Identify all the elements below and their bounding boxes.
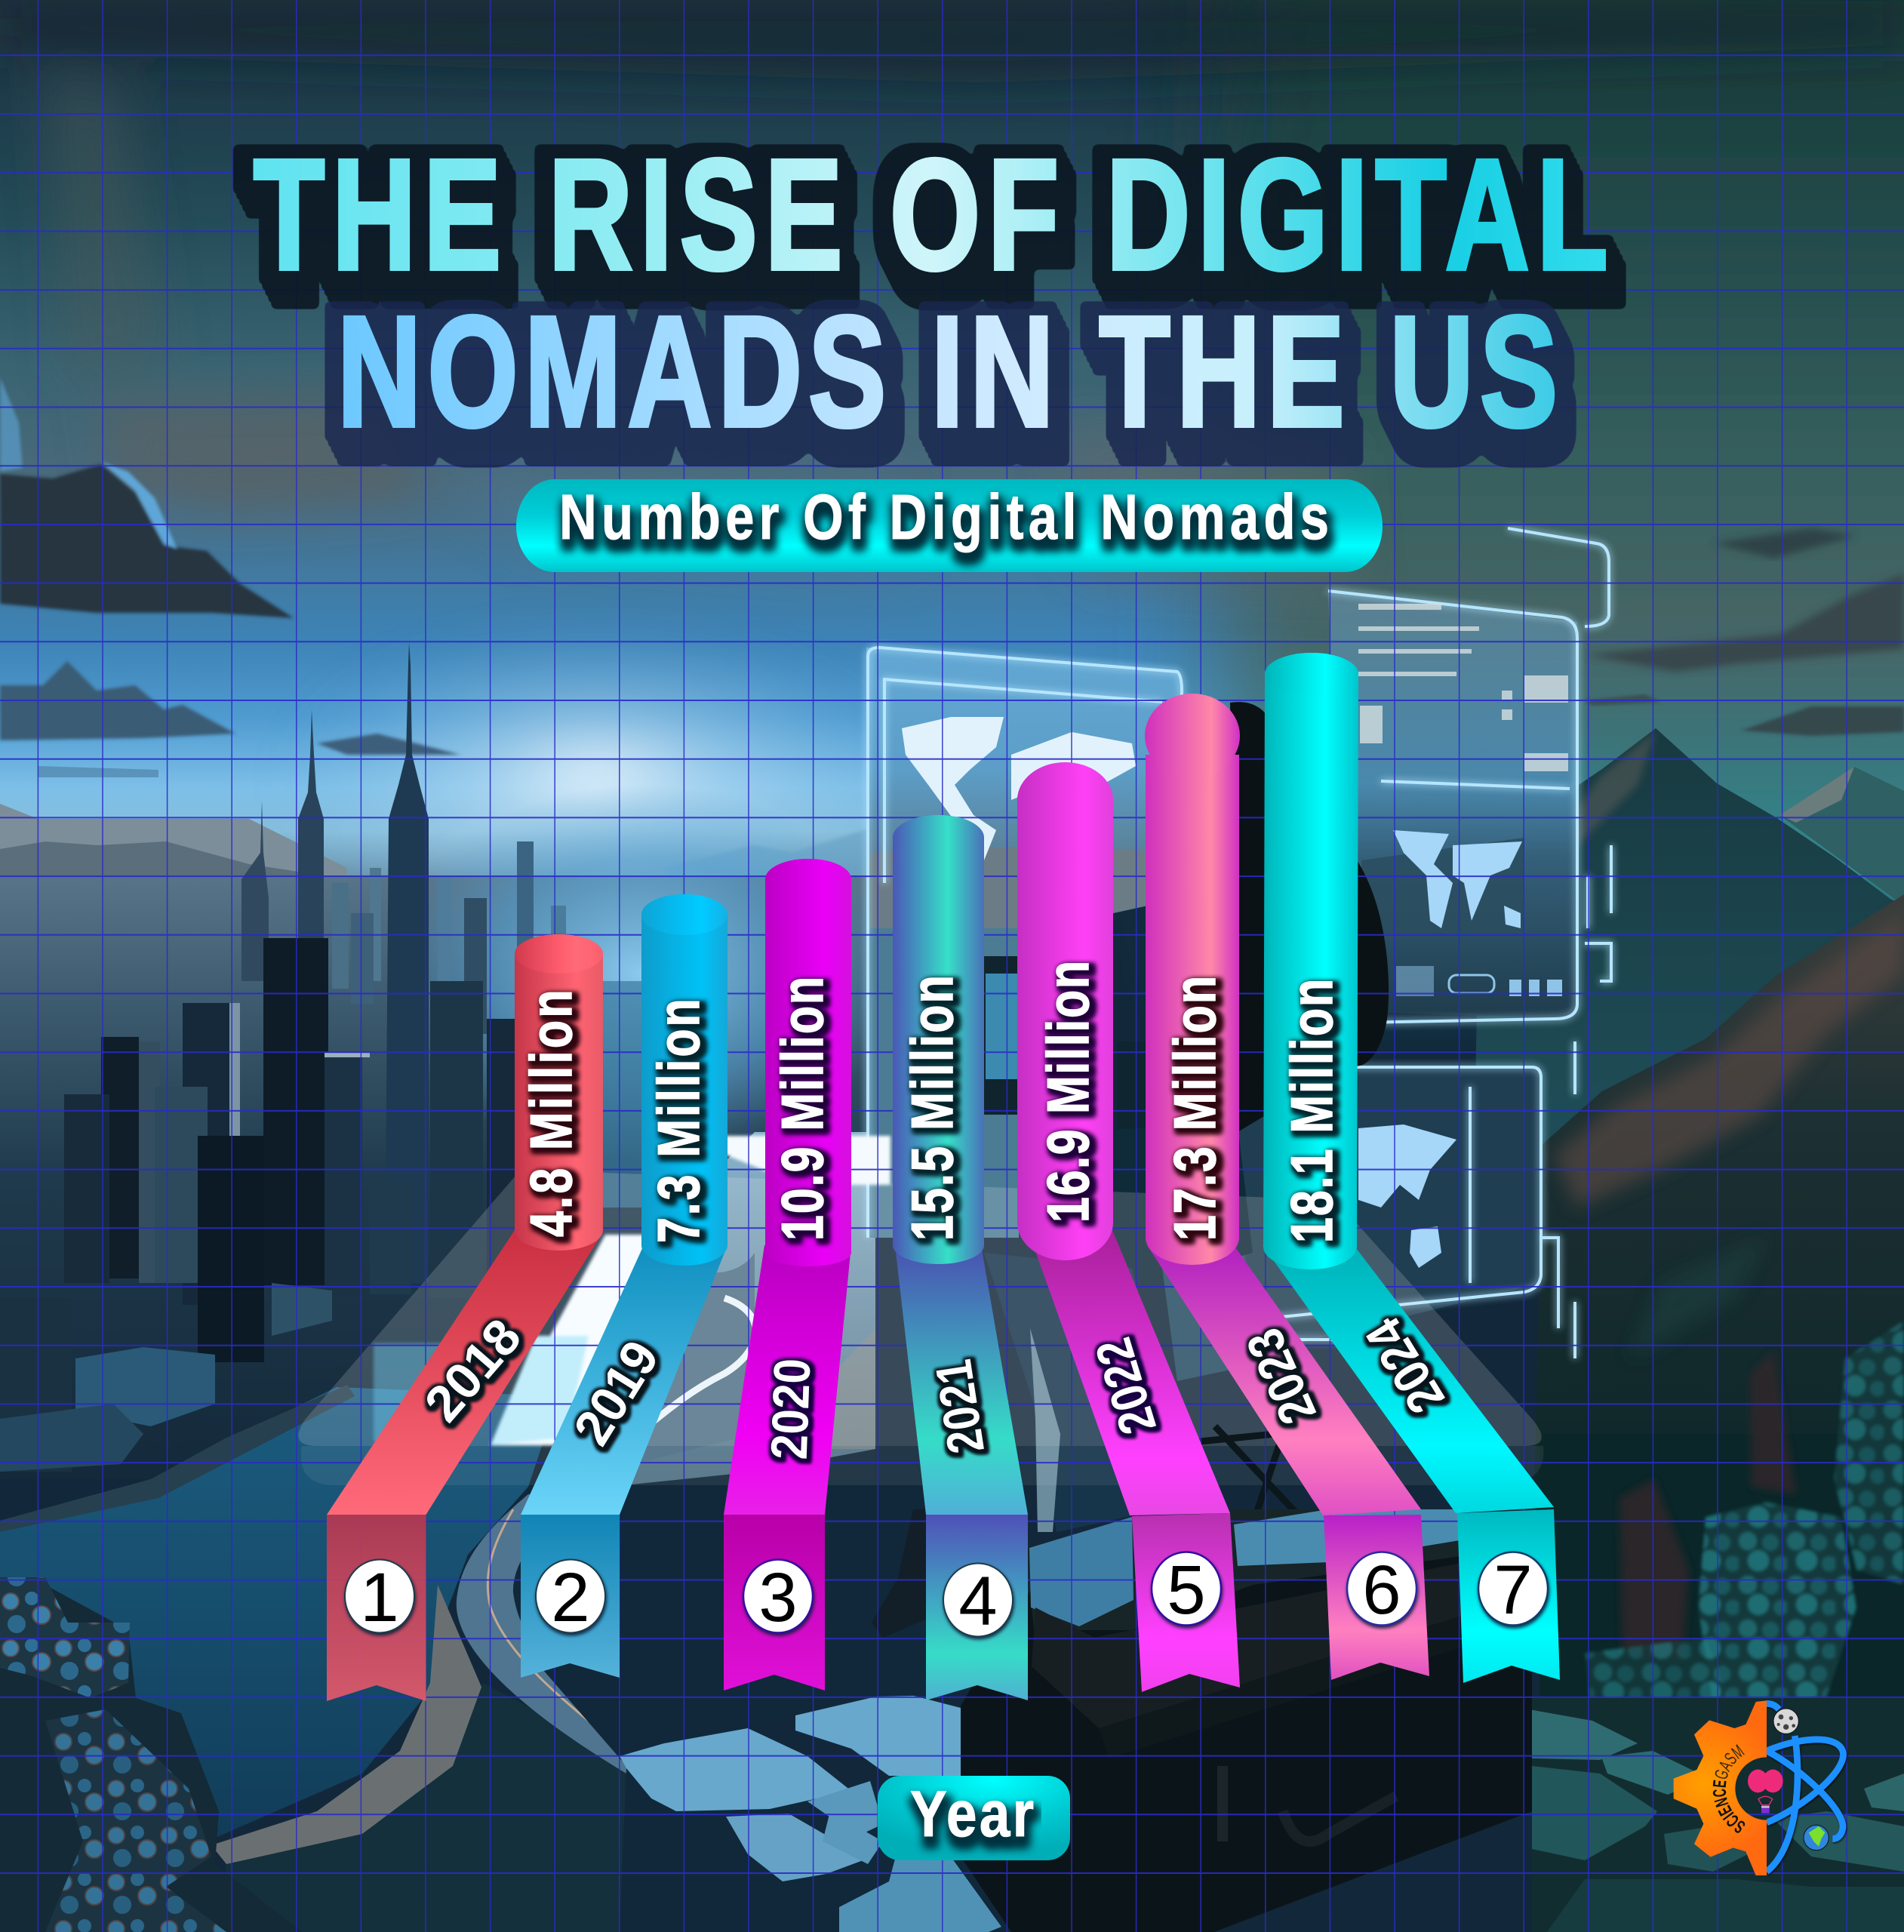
rank 5: 5 <box>1167 1552 1206 1629</box>
cylinder cap 2022 <box>1017 763 1113 837</box>
year 2023: 2023 <box>1235 1320 1327 1432</box>
year 2024: 2024 <box>1355 1308 1456 1423</box>
rank 6: 6 <box>1362 1552 1401 1629</box>
bar 2021: ribbon, cylinder, labels <box>893 815 1028 1700</box>
ribbon upper 2018 <box>327 1230 603 1515</box>
ribbon tail 2018 <box>327 1515 426 1701</box>
world maps <box>902 717 1136 868</box>
left horizon and mountains <box>0 804 347 906</box>
foreground rocks <box>620 1696 1011 1932</box>
value 7.3 Million: 7.3 Million <box>646 998 712 1243</box>
value 17.3 Million: 17.3 Million <box>1162 976 1228 1241</box>
value 16.9 Million: 16.9 Million <box>1035 961 1101 1223</box>
central distant mountains <box>664 826 875 951</box>
cylinder cap 2019 <box>641 894 727 935</box>
ribbon tail 2019 <box>521 1515 620 1678</box>
title line 2: NOMADS IN THE US <box>337 283 1558 459</box>
ribbon upper 2023 <box>1147 1245 1421 1515</box>
value 10.9 Million: 10.9 Million <box>770 977 835 1241</box>
rank 3: 3 <box>758 1559 798 1636</box>
river and shore <box>0 1387 558 1932</box>
cylinder 2022 <box>1017 762 1113 1260</box>
rank 1 <box>345 1559 414 1636</box>
cylinder 2019 <box>641 894 727 1266</box>
rank 7: 7 <box>1493 1552 1533 1629</box>
year axis text: Year <box>910 1777 1034 1850</box>
logo earth <box>1804 1825 1829 1850</box>
bar 2019: ribbon, cylinder, labels <box>521 894 727 1678</box>
rank 4 <box>943 1563 1013 1640</box>
rank 6 <box>1347 1552 1416 1629</box>
ribbon tail 2021 <box>926 1515 1028 1700</box>
panel data bars <box>1358 604 1568 771</box>
value 15.5 Million: 15.5 Million <box>900 975 965 1241</box>
logo gear <box>1674 1700 1767 1875</box>
ribbon upper 2024 <box>1263 1245 1554 1513</box>
clouds <box>0 377 1904 777</box>
right foliage <box>1585 1321 1904 1751</box>
value 4.8 Million: 4.8 Million <box>518 989 584 1237</box>
cylinder cap 2018 <box>515 934 603 974</box>
bar 2022: ribbon, cylinder, labels <box>1017 762 1240 1692</box>
logo wordmark: SCIENCEGASM <box>1713 1744 1745 1833</box>
ribbon upper 2019 <box>521 1245 727 1515</box>
rank 2 <box>536 1559 605 1636</box>
cylinder cap 2020 <box>765 859 851 900</box>
ribbon upper 2020 <box>724 1245 851 1515</box>
ribbon tail 2022 <box>1132 1513 1240 1692</box>
year 2021: 2021 <box>924 1356 995 1457</box>
cylinder 2024 <box>1263 653 1358 1269</box>
cylinder 2023 <box>1146 755 1239 1265</box>
subtitle pill: number of digital nomads <box>516 479 1383 572</box>
ribbon tail 2024 <box>1457 1509 1560 1683</box>
sky glow and soft cloud masses <box>0 0 1904 928</box>
right rocks <box>1529 1698 1904 1932</box>
title line 1: THE RISE OF DIGITAL <box>254 126 1608 302</box>
bar 2018: ribbon, cylinder, labels <box>327 934 603 1701</box>
cylinder cap 2024 <box>1265 653 1358 695</box>
ribbon upper 2021 <box>895 1245 1028 1515</box>
logo moon <box>1773 1709 1798 1734</box>
year 2020: 2020 <box>761 1358 821 1460</box>
bottom-left tree <box>0 1577 302 1932</box>
rank 1: 1 <box>360 1559 399 1636</box>
year 2018: 2018 <box>414 1308 532 1432</box>
logo brain bulb <box>1748 1770 1783 1814</box>
rank 4: 4 <box>958 1563 998 1640</box>
subtitle text: Number Of Digital Nomads <box>559 482 1329 553</box>
year 2022: 2022 <box>1084 1331 1167 1441</box>
bar 2023: ribbon, cylinder, labels <box>1145 694 1429 1680</box>
coastal road <box>457 1494 657 1774</box>
logo: sciencegasm <box>1674 1700 1849 1875</box>
year 2019: 2019 <box>563 1331 670 1455</box>
hillside and winding road <box>574 1132 875 1491</box>
ground behind the ribbons <box>513 1487 1026 1766</box>
bar 2024: ribbon, cylinder, labels <box>1263 653 1560 1683</box>
beach and forest <box>211 1585 483 1864</box>
cylinder 2020 <box>765 859 851 1266</box>
ribbon tail 2020 <box>724 1515 825 1690</box>
seated person <box>872 702 1389 1638</box>
year axis pill <box>878 1776 1070 1860</box>
logo atom <box>1767 1703 1843 1872</box>
title <box>254 126 1607 459</box>
right mountains <box>1472 728 1904 1932</box>
city haze <box>0 875 875 1479</box>
rank 7 <box>1478 1552 1548 1629</box>
value 18.1 Million: 18.1 Million <box>1279 979 1345 1243</box>
rank 3 <box>743 1559 813 1636</box>
panel controls <box>1396 966 1562 996</box>
rank 2: 2 <box>551 1559 590 1636</box>
bright screen glare <box>374 1136 890 1445</box>
cylinder 2021 <box>893 815 984 1264</box>
suitcase <box>961 1509 1532 1932</box>
translucent stage panel <box>298 1170 1543 1485</box>
ribbon tail 2023 <box>1324 1515 1429 1680</box>
skyline <box>0 642 687 1472</box>
cylinder cap 2021 <box>893 815 984 860</box>
ribbon upper 2022 <box>1028 1230 1230 1515</box>
rank 5 <box>1152 1552 1221 1629</box>
folding chair <box>1200 1426 1328 1592</box>
bar 2020: ribbon, cylinder, labels <box>724 859 851 1690</box>
cylinder 2018 <box>515 934 603 1251</box>
cylinder cap 2023 <box>1145 694 1240 778</box>
holographic panels <box>866 528 1611 1358</box>
